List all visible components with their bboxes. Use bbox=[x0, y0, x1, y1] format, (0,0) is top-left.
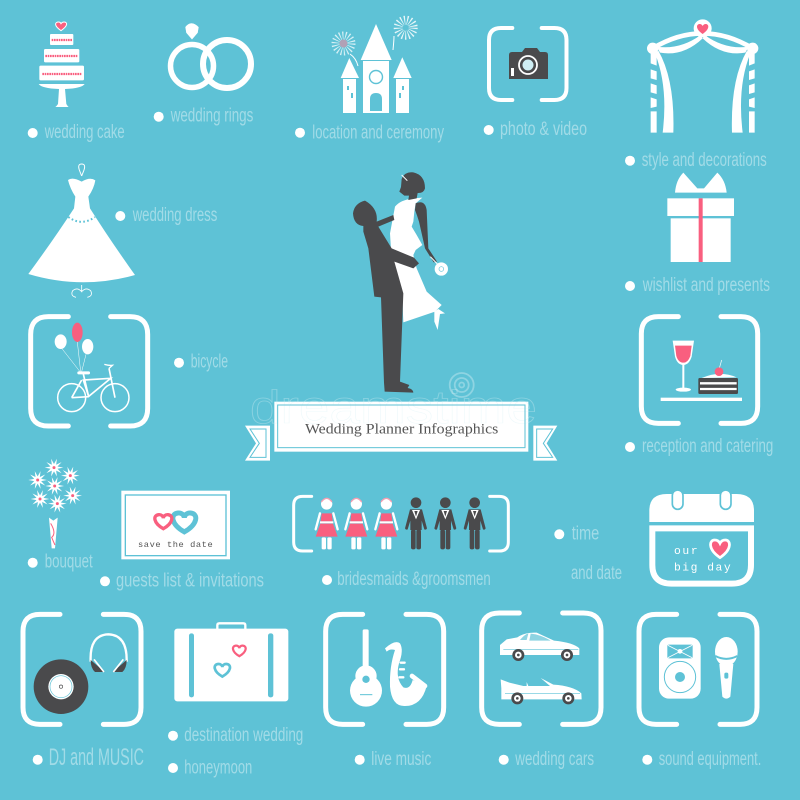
icon: wedding cake bbox=[39, 22, 85, 107]
label: wedding cake bbox=[28, 122, 125, 143]
banner title: Wedding Planner Infographics bbox=[305, 421, 499, 437]
icon: castle with fireworks bbox=[336, 20, 413, 113]
watermark overlay on banner: dreamstime bbox=[250, 381, 537, 433]
label: photo and video bbox=[484, 119, 587, 140]
label: photo and video: photo & video bbox=[500, 119, 587, 140]
label: bridesmaids and groomsmen: bridesmaids &groomsmen bbox=[337, 569, 491, 590]
label: sound equipment bbox=[642, 749, 761, 770]
label: time and date bbox=[554, 524, 622, 584]
label: DJ and music bbox=[33, 744, 144, 771]
title banner bbox=[245, 402, 557, 461]
icon: calendar: big day bbox=[674, 563, 731, 575]
card: save the date bbox=[121, 491, 230, 559]
label: destination wedding bbox=[168, 725, 303, 746]
label: bridesmaids and groomsmen bbox=[322, 569, 491, 590]
bride head bbox=[399, 172, 425, 200]
car: convertible bbox=[501, 678, 582, 699]
icon: wedding rings bbox=[170, 23, 251, 88]
icon: speaker and microphone in bracket bbox=[639, 614, 757, 724]
watermark: dreamstime bbox=[250, 381, 537, 433]
ribbon right bbox=[533, 426, 557, 461]
icon: suitcase bbox=[174, 623, 288, 701]
label: live music bbox=[355, 749, 431, 770]
label: time and date: and date bbox=[571, 563, 622, 584]
label: location and ceremony: location and ceremony bbox=[312, 122, 444, 143]
label: wedding dress bbox=[115, 205, 217, 226]
icon: wine and cake in bracket bbox=[641, 317, 758, 423]
label: wedding cake: wedding cake bbox=[44, 122, 125, 143]
label: honeymoon bbox=[168, 757, 252, 778]
bride dress bbox=[390, 198, 442, 322]
label: wedding cars bbox=[499, 749, 594, 770]
label: wedding rings: wedding rings bbox=[170, 106, 253, 127]
label: live music: live music bbox=[371, 749, 431, 770]
label: location and ceremony bbox=[295, 122, 444, 143]
icon: bouquet bbox=[28, 459, 82, 548]
label: guests list and invitations: guests list & invitations bbox=[116, 571, 264, 592]
ribbon left bbox=[245, 426, 270, 461]
icon: vinyl and headphones in bracket bbox=[23, 614, 141, 724]
label: bicycle bbox=[174, 352, 228, 373]
bride arm bbox=[415, 202, 437, 262]
label: destination wedding: destination wedding bbox=[184, 725, 303, 746]
icon: calendar: our bbox=[674, 546, 698, 558]
banner panel bbox=[274, 402, 528, 452]
bride shoe bbox=[434, 309, 445, 330]
icon: wedding dress bbox=[28, 164, 135, 297]
label: wedding cars: wedding cars bbox=[515, 749, 594, 770]
icon: wedding arch bbox=[647, 19, 758, 133]
label: time and date: time bbox=[572, 524, 599, 544]
icon: camera in bracket bbox=[489, 28, 566, 100]
icon: bridesmaids and groomsmen in bracket bbox=[294, 496, 508, 551]
illustration: couple silhouette bbox=[353, 172, 448, 393]
car: sedan bbox=[500, 633, 579, 655]
label: wedding dress: wedding dress bbox=[132, 205, 217, 226]
icon: wedding cars in bracket bbox=[482, 613, 601, 724]
icon: gift box bbox=[667, 173, 734, 262]
card: save the date: save the date bbox=[138, 540, 213, 550]
label: bicycle: bicycle bbox=[191, 352, 228, 373]
label: honeymoon: honeymoon bbox=[184, 757, 252, 778]
groom bbox=[353, 201, 419, 393]
bouquet bbox=[435, 262, 448, 276]
label: wedding rings bbox=[154, 106, 253, 127]
label: bouquet: bouquet bbox=[45, 552, 93, 573]
icon: bicycle with balloons in bracket bbox=[31, 317, 148, 426]
label: bouquet bbox=[28, 552, 93, 573]
icon: watermark spiral bbox=[450, 373, 474, 397]
label: DJ and music: DJ and MUSIC bbox=[49, 744, 144, 771]
icon: calendar bbox=[649, 490, 754, 584]
icon: guitar and saxophone in bracket bbox=[326, 614, 444, 724]
